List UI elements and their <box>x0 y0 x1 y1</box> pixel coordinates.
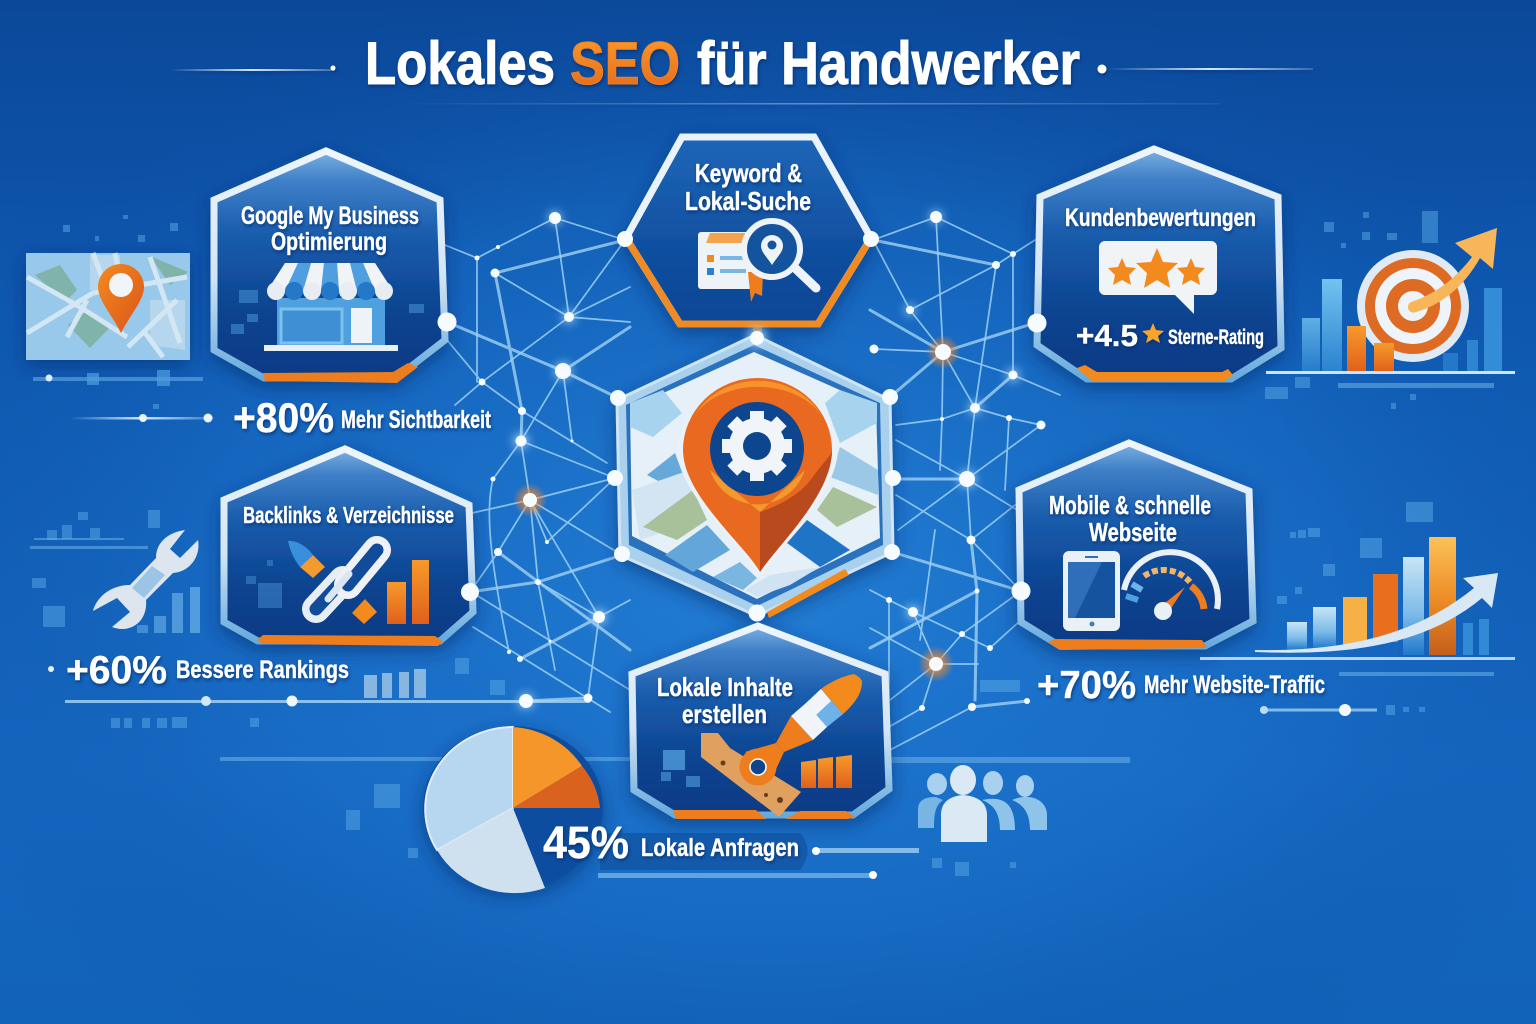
title: Lokales <box>365 30 555 97</box>
stat: +70% Mehr Website-Traffic: +70% <box>1037 664 1136 707</box>
heading: Mobile & schnelle: Mobile & schnelle <box>1049 490 1211 520</box>
heading: Backlinks & Verzeichnisse: Backlinks & Verzeichnisse <box>243 502 454 528</box>
stat: +4.5 star rating: +4.5 <box>1076 318 1138 353</box>
heading: Kundenbewertungen: Kundenbewertungen <box>1065 204 1256 232</box>
stat: +60% Bessere Rankings <box>66 649 349 692</box>
chart: rising bars with arrow <box>1200 537 1515 660</box>
timeline under rankings <box>48 666 590 706</box>
stat: +80% Mehr Sichtbarkeit: Mehr Sichtbarkeit <box>341 406 491 434</box>
icon: group of people <box>918 765 1047 842</box>
stat: +60% Bessere Rankings: +60% <box>66 649 167 692</box>
stat: +60% Bessere Rankings: Bessere Rankings <box>176 656 349 684</box>
heading: Optimierung: Optimierung <box>271 228 387 256</box>
panel: Mobile & schnelle Webseite <box>1019 443 1253 650</box>
anchor nodes on panels <box>438 231 1046 622</box>
timelines under Lokale Anfragen <box>598 847 919 879</box>
horizontal accent lines <box>30 383 1494 763</box>
icon: storefront <box>264 263 398 351</box>
icon: map with location pin <box>26 253 190 360</box>
panel: centre map hexagon <box>617 335 893 618</box>
icon: speech bubble with stars <box>1099 241 1217 314</box>
title: für Handwerker <box>697 30 1080 97</box>
icon: phone <box>1063 551 1120 631</box>
stat: 45% Lokale Anfragen <box>543 817 808 870</box>
icon: ruler, brush and bars <box>661 674 862 817</box>
panel: Lokale Inhalte erstellen <box>632 626 889 819</box>
panel: Keyword & Lokal-Suche <box>626 137 871 324</box>
panel: Kundenbewertungen <box>1037 149 1281 382</box>
heading: Google My Business: Google My Business <box>241 202 419 230</box>
stat: +70% Mehr Website-Traffic <box>1037 664 1325 707</box>
small timeline left top <box>33 370 213 422</box>
heading: erstellen: erstellen <box>682 699 767 729</box>
chart: target with bars and arrow <box>1266 228 1515 374</box>
icon: speedometer <box>1124 552 1218 620</box>
connector: orange stem <box>753 323 762 335</box>
icon: chain link with brush and bars <box>288 541 429 624</box>
stat: 45% Lokale Anfragen: Lokale Anfragen <box>641 834 799 862</box>
heading: Webseite: Webseite <box>1089 517 1177 547</box>
stat: +80% Mehr Sichtbarkeit <box>233 394 491 441</box>
icon: gear <box>722 411 792 481</box>
small bars under backlinks <box>364 669 426 698</box>
heading: Keyword &: Keyword & <box>695 158 802 188</box>
title: SEO <box>570 30 680 97</box>
stat: 45% Lokale Anfragen: 45% <box>543 817 629 868</box>
icon: target <box>1357 250 1469 362</box>
panel: Backlinks & Verzeichnisse <box>224 449 473 646</box>
stat: +4.5 star rating <box>1076 318 1264 353</box>
decorative data blocks <box>32 211 1438 876</box>
icon: orange pin on map <box>98 264 144 333</box>
stat: +80% Mehr Sichtbarkeit: +80% <box>233 394 334 441</box>
timeline under traffic <box>1260 704 1377 716</box>
network nodes <box>438 211 1046 711</box>
icon: growth arrow <box>1255 573 1498 653</box>
icon: rising arrow <box>1408 228 1497 313</box>
chart: pie chart <box>423 726 603 893</box>
panel: Google My Business <box>214 151 445 383</box>
icon: document and magnifier <box>698 221 816 302</box>
stat: +70% Mehr Website-Traffic: Mehr Website-Traffic <box>1144 671 1325 699</box>
heading: Lokal-Suche: Lokal-Suche <box>685 186 811 216</box>
icon: wrench with small bars <box>93 530 200 633</box>
network of connecting lines <box>445 217 1060 750</box>
heading: Lokale Inhalte: Lokale Inhalte <box>657 672 793 702</box>
title <box>170 30 1313 104</box>
map shapes <box>630 390 878 597</box>
stat: +4.5 star rating: Sterne-Rating <box>1168 326 1264 349</box>
icon: orange location pin with gear <box>677 378 838 578</box>
